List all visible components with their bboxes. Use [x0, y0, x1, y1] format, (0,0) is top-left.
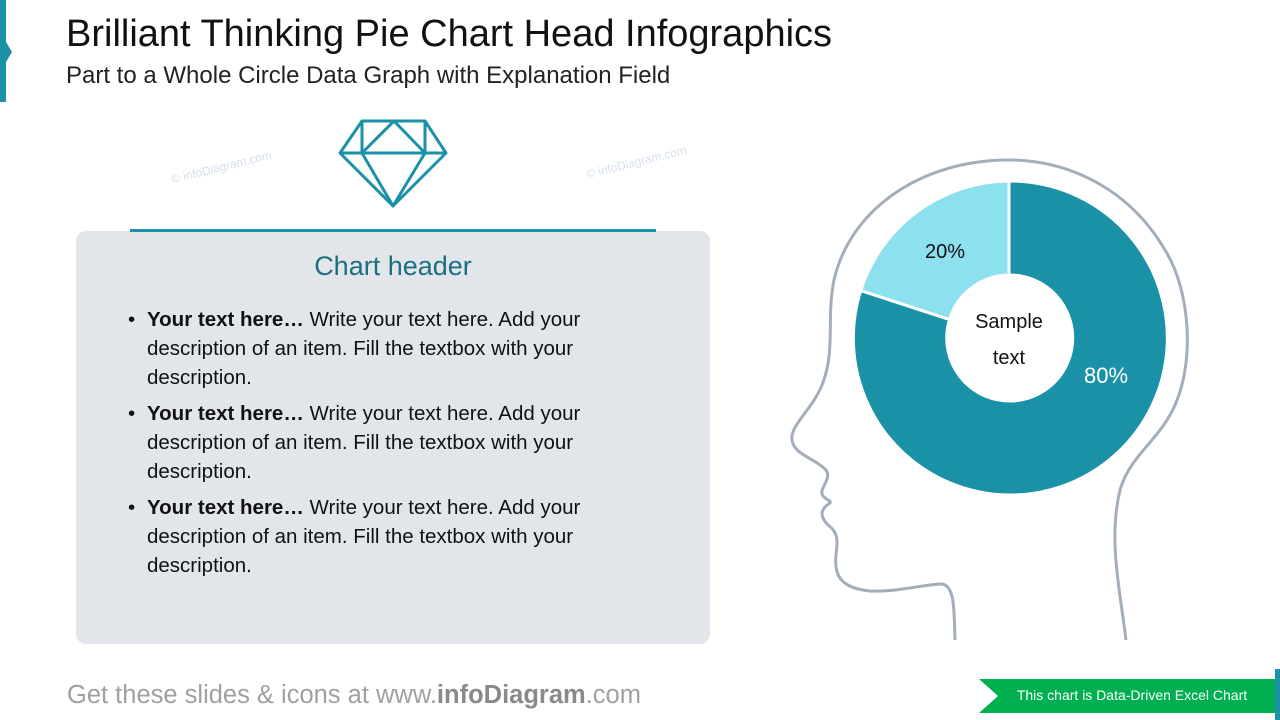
panel: text box [76, 231, 710, 644]
donut: 20% [861, 181, 1009, 320]
bullet list: • [128, 496, 135, 519]
center text: Sample [975, 311, 1043, 333]
head donut chart: text [993, 347, 1026, 369]
accent bar [0, 0, 6, 102]
bullet list: • [128, 308, 135, 331]
text: © infoDiagram.com [585, 143, 688, 181]
footer: Get these slides & icons at www.infoDiagram.com [67, 681, 641, 709]
chart header: Chart header [314, 251, 472, 281]
corner accent [1275, 669, 1280, 720]
data-driven tag [979, 679, 1275, 713]
data-driven tag: This chart is Data-Driven Excel Chart [1017, 687, 1247, 703]
accent notch [6, 42, 12, 62]
icon: diamond [338, 119, 448, 208]
donut: 80% [853, 181, 1167, 495]
bullet list [128, 308, 580, 577]
label 20%: 20% [925, 241, 965, 263]
bullet list: Your text here… Write your text here. Add your description of an item. Fill the textbox with your description. [147, 496, 580, 577]
watermarks: © infoDiagram.com [170, 148, 273, 186]
title: Brilliant Thinking Pie Chart Head Infographics [66, 13, 832, 55]
header rule [130, 229, 656, 232]
subtitle: Part to a Whole Circle Data Graph with Explanation Field [66, 62, 670, 89]
label 80%: 80% [1084, 363, 1128, 388]
bullet list: • [128, 402, 135, 425]
bullet list: Your text here… Write your text here. Add your description of an item. Fill the textbox with your description. [147, 402, 580, 483]
head donut chart [790, 158, 1189, 640]
bullet list: Your text here… Write your text here. Add your description of an item. Fill the textbox with your description. [147, 308, 580, 389]
head outline [792, 160, 1187, 640]
